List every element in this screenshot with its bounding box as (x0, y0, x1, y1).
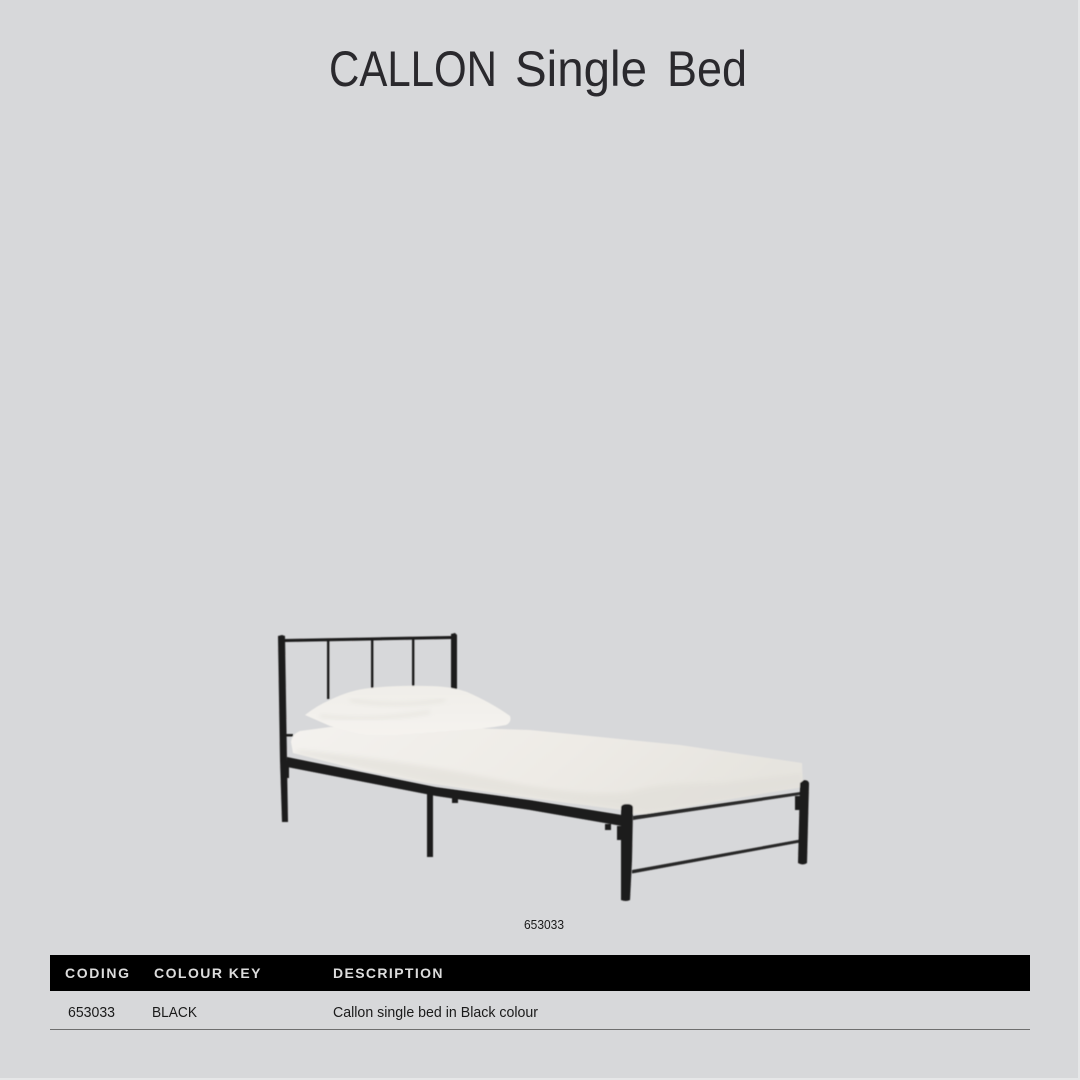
foot rails (633, 792, 800, 820)
front leg (621, 804, 633, 901)
description value: Callon single bed in Black colour (333, 1005, 538, 1021)
coding value: 653033 (68, 1005, 115, 1021)
side rail (287, 757, 622, 826)
pillow creases (320, 700, 445, 718)
table header (50, 955, 1030, 991)
title: Single (515, 41, 647, 97)
mattress (291, 727, 803, 814)
title: Bed (667, 41, 747, 97)
far leg stub (452, 796, 458, 803)
product image: black metal single bed (278, 633, 809, 901)
title: CALLON (329, 41, 497, 97)
middle leg (427, 791, 433, 857)
product code caption: 653033 (524, 918, 564, 932)
column: description: DESCRIPTION (333, 965, 442, 981)
pillow (305, 686, 510, 735)
column: colour key: COLOUR KEY (154, 965, 261, 981)
headboard frame (278, 633, 457, 822)
table row (50, 1005, 1030, 1030)
column: coding: CODING (65, 965, 129, 981)
title (329, 41, 747, 97)
foot post (798, 780, 809, 864)
colour value: BLACK (152, 1005, 197, 1021)
mattress shading (293, 750, 803, 814)
brackets (285, 765, 800, 840)
